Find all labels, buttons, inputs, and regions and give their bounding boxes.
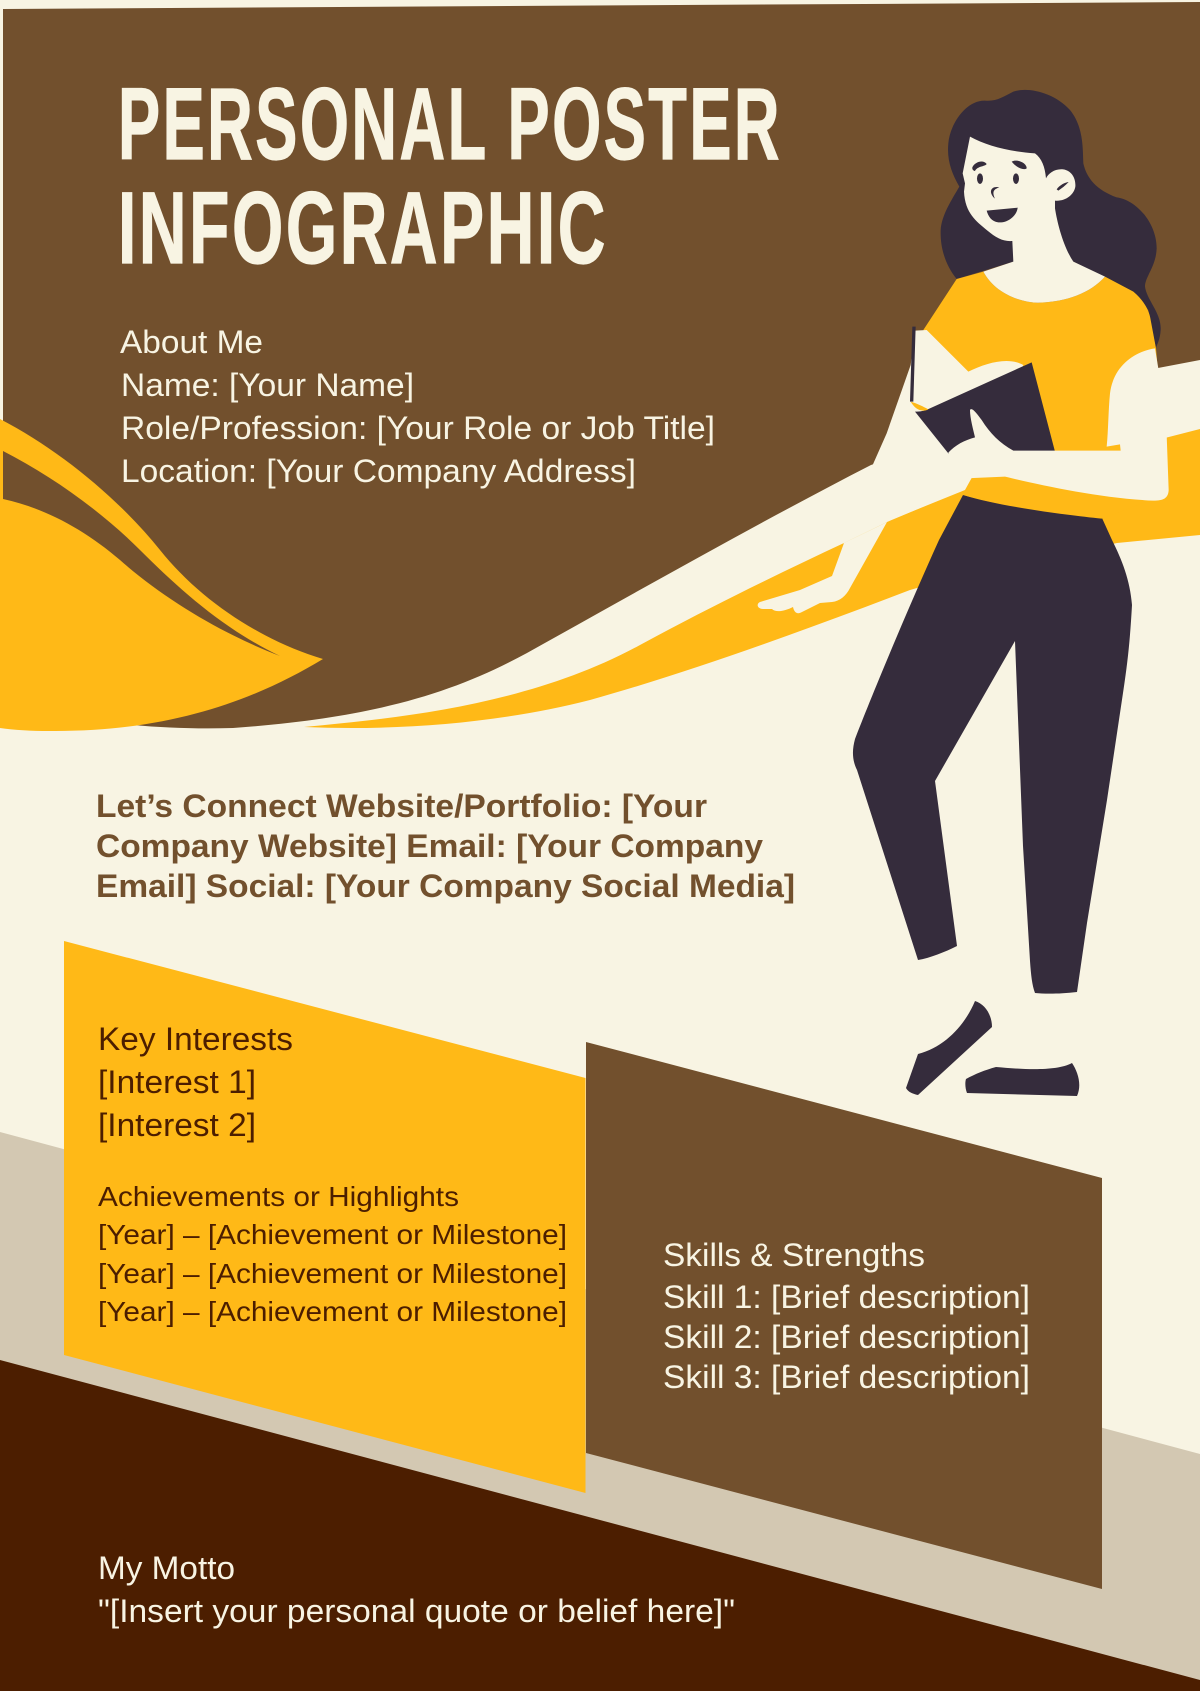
- title: PERSONAL POSTER: [118, 67, 782, 181]
- text block: achievements: Achievements or Highlights: [98, 1181, 459, 1212]
- right arm and hand: [948, 348, 1169, 501]
- right yellow wave: [304, 429, 1200, 728]
- text block: let's connect: Let’s Connect Website/Portfolio: [Your: [96, 788, 707, 824]
- text block: key interests: [98, 1021, 293, 1143]
- text block: key interests: [Interest 2]: [98, 1107, 256, 1143]
- left arm: [843, 330, 1023, 543]
- text block: let's connect: Company Website] Email: [Your Company: [96, 828, 763, 864]
- hair: [941, 90, 1161, 348]
- nose: [991, 187, 999, 199]
- text block: let's connect: [96, 788, 795, 904]
- text block: achievements: [Year] – [Achievement or Milestone]: [98, 1296, 567, 1327]
- eyes: [977, 173, 1019, 184]
- book: [915, 362, 1055, 453]
- text block: key interests: [Interest 1]: [98, 1064, 256, 1100]
- text block: let's connect: Email] Social: [Your Company Social Media]: [96, 868, 795, 904]
- text block: about me: [120, 324, 715, 489]
- text block: achievements: [98, 1181, 567, 1327]
- text block: motto: [98, 1550, 735, 1629]
- text block: achievements: [Year] – [Achievement or Milestone]: [98, 1258, 567, 1289]
- text block: skills: [663, 1237, 1030, 1395]
- left eyebrow: [972, 162, 987, 171]
- mouth: [987, 208, 1018, 222]
- left yellow swoosh: [0, 419, 323, 731]
- right eyebrow: [1012, 161, 1027, 169]
- text block: about me: About Me: [120, 324, 263, 360]
- text block: motto: My Motto: [98, 1550, 235, 1586]
- upper body in zoomed coordinates: [843, 90, 1169, 543]
- brown sliver in swoosh: [3, 451, 280, 656]
- title: INFOGRAPHIC: [118, 171, 608, 285]
- face and neck: [963, 137, 1105, 303]
- text block: key interests: Key Interests: [98, 1021, 293, 1057]
- right shoe: [965, 1063, 1079, 1096]
- book spine: [910, 327, 916, 402]
- dark brown footer panel: [0, 1360, 1200, 1691]
- ear detail: [1057, 182, 1069, 191]
- text block: skills: Skill 2: [Brief description]: [663, 1319, 1030, 1355]
- text block: about me: Name: [Your Name]: [121, 367, 414, 403]
- title: [118, 67, 782, 285]
- brown header panel: [3, 2, 1200, 728]
- left shoe: [906, 1001, 992, 1095]
- text block: about me: Location: [Your Company Address]: [121, 453, 636, 489]
- panel: key interests and achievements: [64, 941, 586, 1493]
- text block: achievements: [Year] – [Achievement or Milestone]: [98, 1219, 567, 1250]
- text block: motto: "[Insert your personal quote or belief here]": [98, 1593, 735, 1629]
- text block: skills: Skill 3: [Brief description]: [663, 1359, 1030, 1395]
- trousers: [853, 495, 1132, 994]
- hand and forearm: [758, 522, 887, 613]
- text block: about me: Role/Profession: [Your Role or Job Title]: [121, 410, 715, 446]
- text block: skills: Skills & Strengths: [663, 1237, 925, 1273]
- shirt: [923, 272, 1168, 519]
- beige diagonal band: [0, 1132, 1200, 1691]
- illustration: woman reading book: [758, 90, 1169, 1096]
- text block: skills: Skill 1: [Brief description]: [663, 1279, 1030, 1315]
- panel: skills and strengths: [586, 1042, 1102, 1589]
- book page: [911, 402, 928, 411]
